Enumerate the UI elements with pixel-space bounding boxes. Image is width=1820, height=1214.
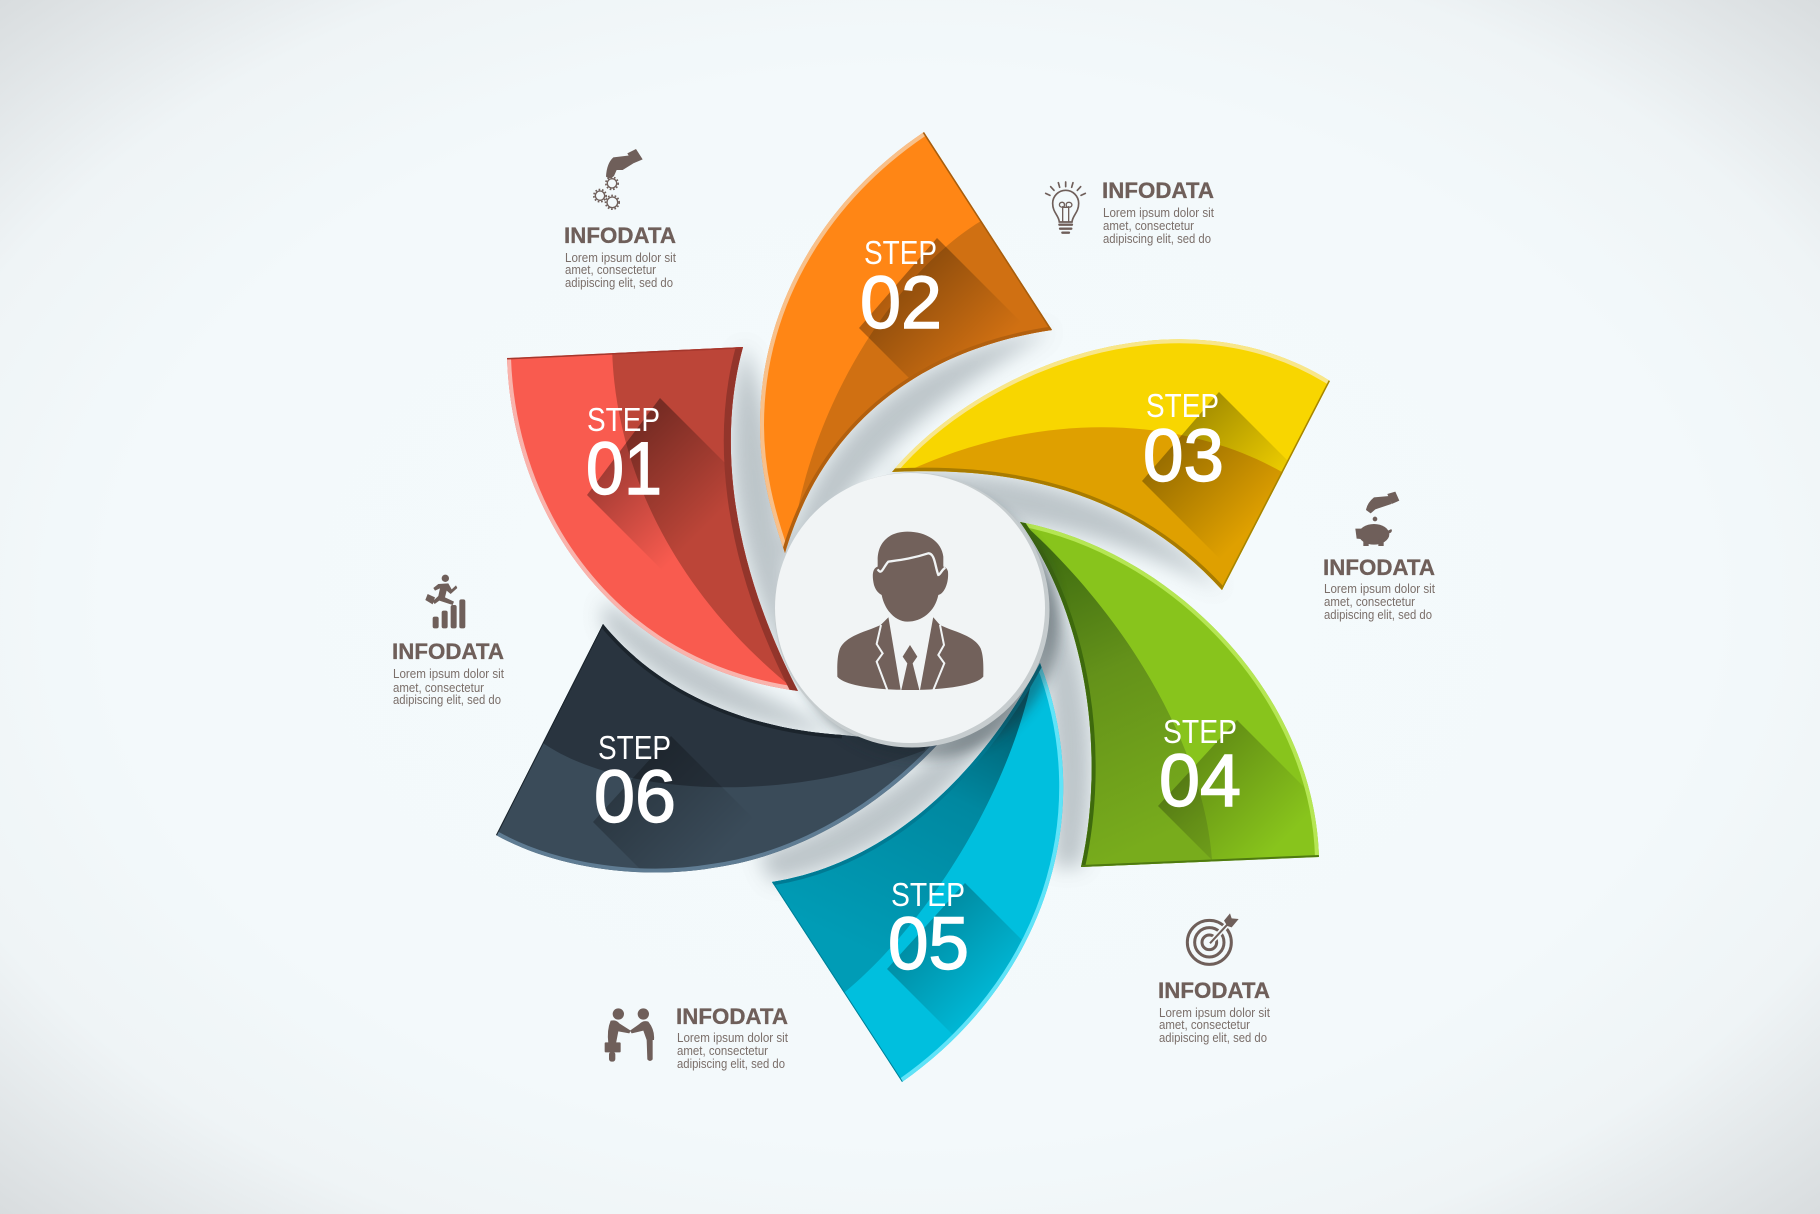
label: step 04: 04 [1159,739,1241,822]
central circle [774,472,1059,759]
text: infodata: Lorem ipsum dolor sit [1324,581,1435,596]
icon: hand with gears [594,149,643,209]
label: step 02: 02 [860,261,942,344]
text: infodata: adipiscing elit, sed do [1103,231,1211,246]
info block: bottom left [605,1004,788,1071]
text: infodata: Lorem ipsum dolor sit [565,250,676,265]
text: infodata: adipiscing elit, sed do [393,692,501,707]
petal: step 04 [1020,522,1319,867]
text: infodata: INFODATA [1158,978,1270,1003]
text: infodata: INFODATA [1102,178,1214,203]
text: infodata: Lorem ipsum dolor sit [677,1030,788,1045]
icon: light bulb [1046,182,1085,233]
icon: businessman [837,532,983,690]
petal: step 06 [496,624,937,872]
info block: left [392,575,504,707]
text: infodata: amet, consectetur [677,1043,769,1058]
petal: step 05 [772,663,1064,1082]
text: infodata: adipiscing elit, sed do [1324,607,1432,622]
text: infodata: adipiscing elit, sed do [677,1056,785,1071]
text: infodata: Lorem ipsum dolor sit [393,666,504,681]
info block: bottom right [1158,913,1270,1045]
label: step 04: STEP [1163,713,1237,750]
text: infodata: adipiscing elit, sed do [565,275,673,290]
label: step 02: STEP [864,234,937,271]
icon: target with arrow [1187,913,1239,964]
label: step 06: 06 [594,755,676,838]
icon: piggy bank [1355,492,1399,546]
label: step 05: 05 [888,902,969,985]
label: step 01: 01 [586,427,662,510]
text: infodata [1158,978,1270,1045]
text: infodata: INFODATA [676,1004,788,1029]
text: infodata: INFODATA [392,639,504,664]
info block: top left [564,149,676,290]
info block: right [1323,492,1435,622]
label: step 03: 03 [1143,414,1224,497]
label: step 05: STEP [891,876,965,913]
text: infodata [1102,178,1214,246]
info block: top right [1046,178,1214,246]
petal: step 03 [892,339,1330,590]
text: infodata: adipiscing elit, sed do [1159,1030,1267,1045]
text: infodata: Lorem ipsum dolor sit [1103,205,1214,220]
icon: runner on bar chart [425,575,465,628]
petal: step 01 [507,347,798,691]
text: infodata: amet, consectetur [1103,218,1195,233]
label: step 01: STEP [587,401,660,438]
text: infodata: INFODATA [564,223,676,248]
label: step 03: STEP [1146,387,1219,424]
label: step 06: STEP [598,729,671,766]
text: infodata: amet, consectetur [1324,594,1416,609]
text: infodata [1323,555,1435,622]
text: infodata: Lorem ipsum dolor sit [1159,1005,1270,1020]
text: infodata [564,223,676,290]
text: infodata: amet, consectetur [393,680,485,695]
text: infodata: INFODATA [1323,555,1435,580]
petal: step 02 [760,132,1052,553]
icon: handshake [605,1008,654,1062]
text: infodata: amet, consectetur [1159,1017,1251,1032]
text: infodata [392,639,504,707]
text: infodata [676,1004,788,1071]
text: infodata: amet, consectetur [565,262,657,277]
petal shadows [603,330,1222,882]
